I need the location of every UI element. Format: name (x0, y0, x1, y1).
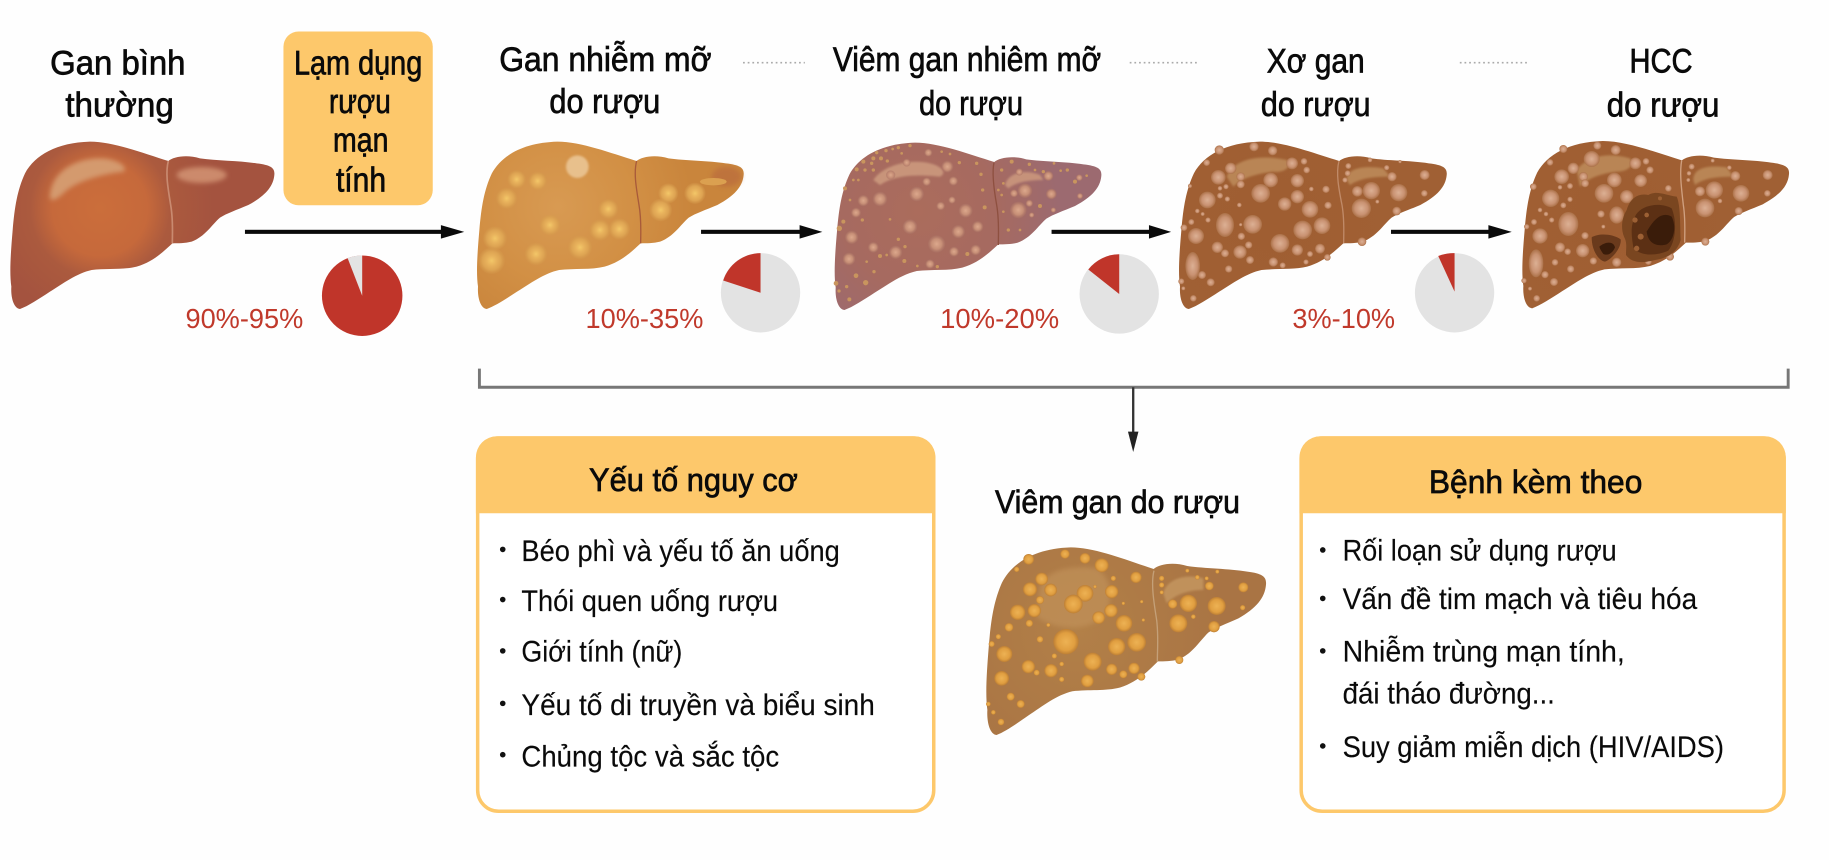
pie chart: 90%-95% (322, 255, 402, 336)
title: Gan nhiễm mỡ do rượu (499, 41, 712, 121)
panel: risk factors (476, 436, 935, 811)
list: comorbidities: Nhiễm trùng mạn tính, (1343, 635, 1625, 668)
stage: alcoholic steatohepatitis (833, 41, 1101, 310)
panel header: risk factors (476, 436, 935, 513)
arrow: normal to fatty liver (245, 225, 464, 239)
list: comorbidities: Rối loạn sử dụng rượu (1343, 535, 1617, 567)
title: Gan nhiễm mỡ do rượu: do rượu (549, 83, 660, 121)
title: Xơ gan do rượu (1261, 42, 1371, 124)
list: comorbidities: đái tháo đường... (1343, 678, 1555, 710)
list: risk factors: Yếu tố di truyền và biểu sinh (521, 690, 875, 722)
title: Viêm gan nhiễm mỡ do rượu (833, 41, 1101, 123)
illustration: fatty liver (477, 142, 744, 309)
illustration: steatohepatitis liver (834, 143, 1101, 310)
arrow: steatohepatitis to cirrhosis (1052, 225, 1171, 239)
title: Gan bình thường: thường (65, 87, 174, 125)
callout: chronic alcohol abuse: mạn (333, 122, 388, 160)
separator: dotted 1 (743, 62, 805, 64)
illustration: HCC liver with tumour (1521, 141, 1789, 308)
title: Xơ gan do rượu: do rượu (1261, 86, 1371, 124)
title: Gan nhiễm mỡ do rượu: Gan nhiễm mỡ (499, 41, 712, 79)
arrow: down to alcoholic hepatitis (1128, 387, 1138, 452)
title: Viêm gan nhiễm mỡ do rượu: do rượu (919, 85, 1023, 123)
arrow: fatty liver to steatohepatitis (701, 225, 822, 239)
stage: normal liver (10, 45, 274, 309)
stage: alcoholic cirrhosis (1178, 42, 1447, 309)
callout: chronic alcohol abuse: Lạm dụng (294, 45, 422, 83)
panel header: comorbidities: Bệnh kèm theo (1429, 463, 1642, 500)
list: risk factors: Thói quen uống rượu (521, 586, 778, 618)
tumour (1592, 193, 1681, 262)
title: Xơ gan do rượu: Xơ gan (1267, 42, 1365, 80)
list: risk factors: Béo phì và yếu tố ăn uống (521, 536, 840, 568)
separator: dotted 2 (1130, 62, 1199, 64)
label: 3%-10%: 3%-10% (1292, 303, 1395, 334)
panel header: comorbidities (1299, 436, 1786, 513)
callout: chronic alcohol abuse: tính (336, 161, 386, 199)
stage: alcoholic HCC (1521, 42, 1789, 308)
bracket: group of stages (479, 369, 1788, 387)
list: risk factors (500, 536, 875, 773)
list: risk factors: Giới tính (nữ) (521, 636, 682, 668)
label: 90%-95%: 90%-95% (185, 303, 303, 334)
list: comorbidities (1320, 535, 1724, 764)
illustration: cirrhotic liver (1178, 142, 1447, 309)
title: HCC do rượu: do rượu (1607, 87, 1719, 125)
pie chart: 3%-10% (1415, 253, 1494, 332)
panel header: risk factors: Yếu tố nguy cơ (589, 461, 798, 498)
list: comorbidities: Vấn đề tim mạch và tiêu hóa (1343, 584, 1698, 616)
stage: alcoholic fatty liver (477, 41, 744, 309)
pie chart: 10%-35% (721, 253, 800, 332)
title: Gan bình thường (50, 45, 185, 125)
title: HCC do rượu: HCC (1630, 42, 1693, 80)
pie chart: 10%-20% (1080, 254, 1159, 334)
list: comorbidities: Suy giảm miễn dịch (HIV/AIDS) (1343, 731, 1724, 764)
heading: alcoholic hepatitis: Viêm gan do rượu (995, 483, 1240, 520)
illustration: alcoholic hepatitis liver (986, 547, 1266, 735)
illustration: normal liver (10, 142, 274, 309)
arrow: cirrhosis to HCC (1391, 225, 1512, 239)
label: 10%-20%: 10%-20% (940, 303, 1059, 334)
title: Gan bình thường: Gan bình (50, 45, 185, 83)
list: risk factors: Chủng tộc và sắc tộc (521, 740, 779, 773)
title: HCC do rượu (1607, 42, 1719, 125)
panel: comorbidities (1299, 436, 1786, 811)
callout: chronic alcohol abuse (283, 31, 433, 205)
label: 10%-35%: 10%-35% (586, 303, 703, 334)
callout: chronic alcohol abuse: rượu (329, 83, 391, 121)
title: Viêm gan nhiễm mỡ do rượu: Viêm gan nhiêm mỡ (833, 41, 1101, 79)
separator: dotted 3 (1460, 62, 1527, 64)
